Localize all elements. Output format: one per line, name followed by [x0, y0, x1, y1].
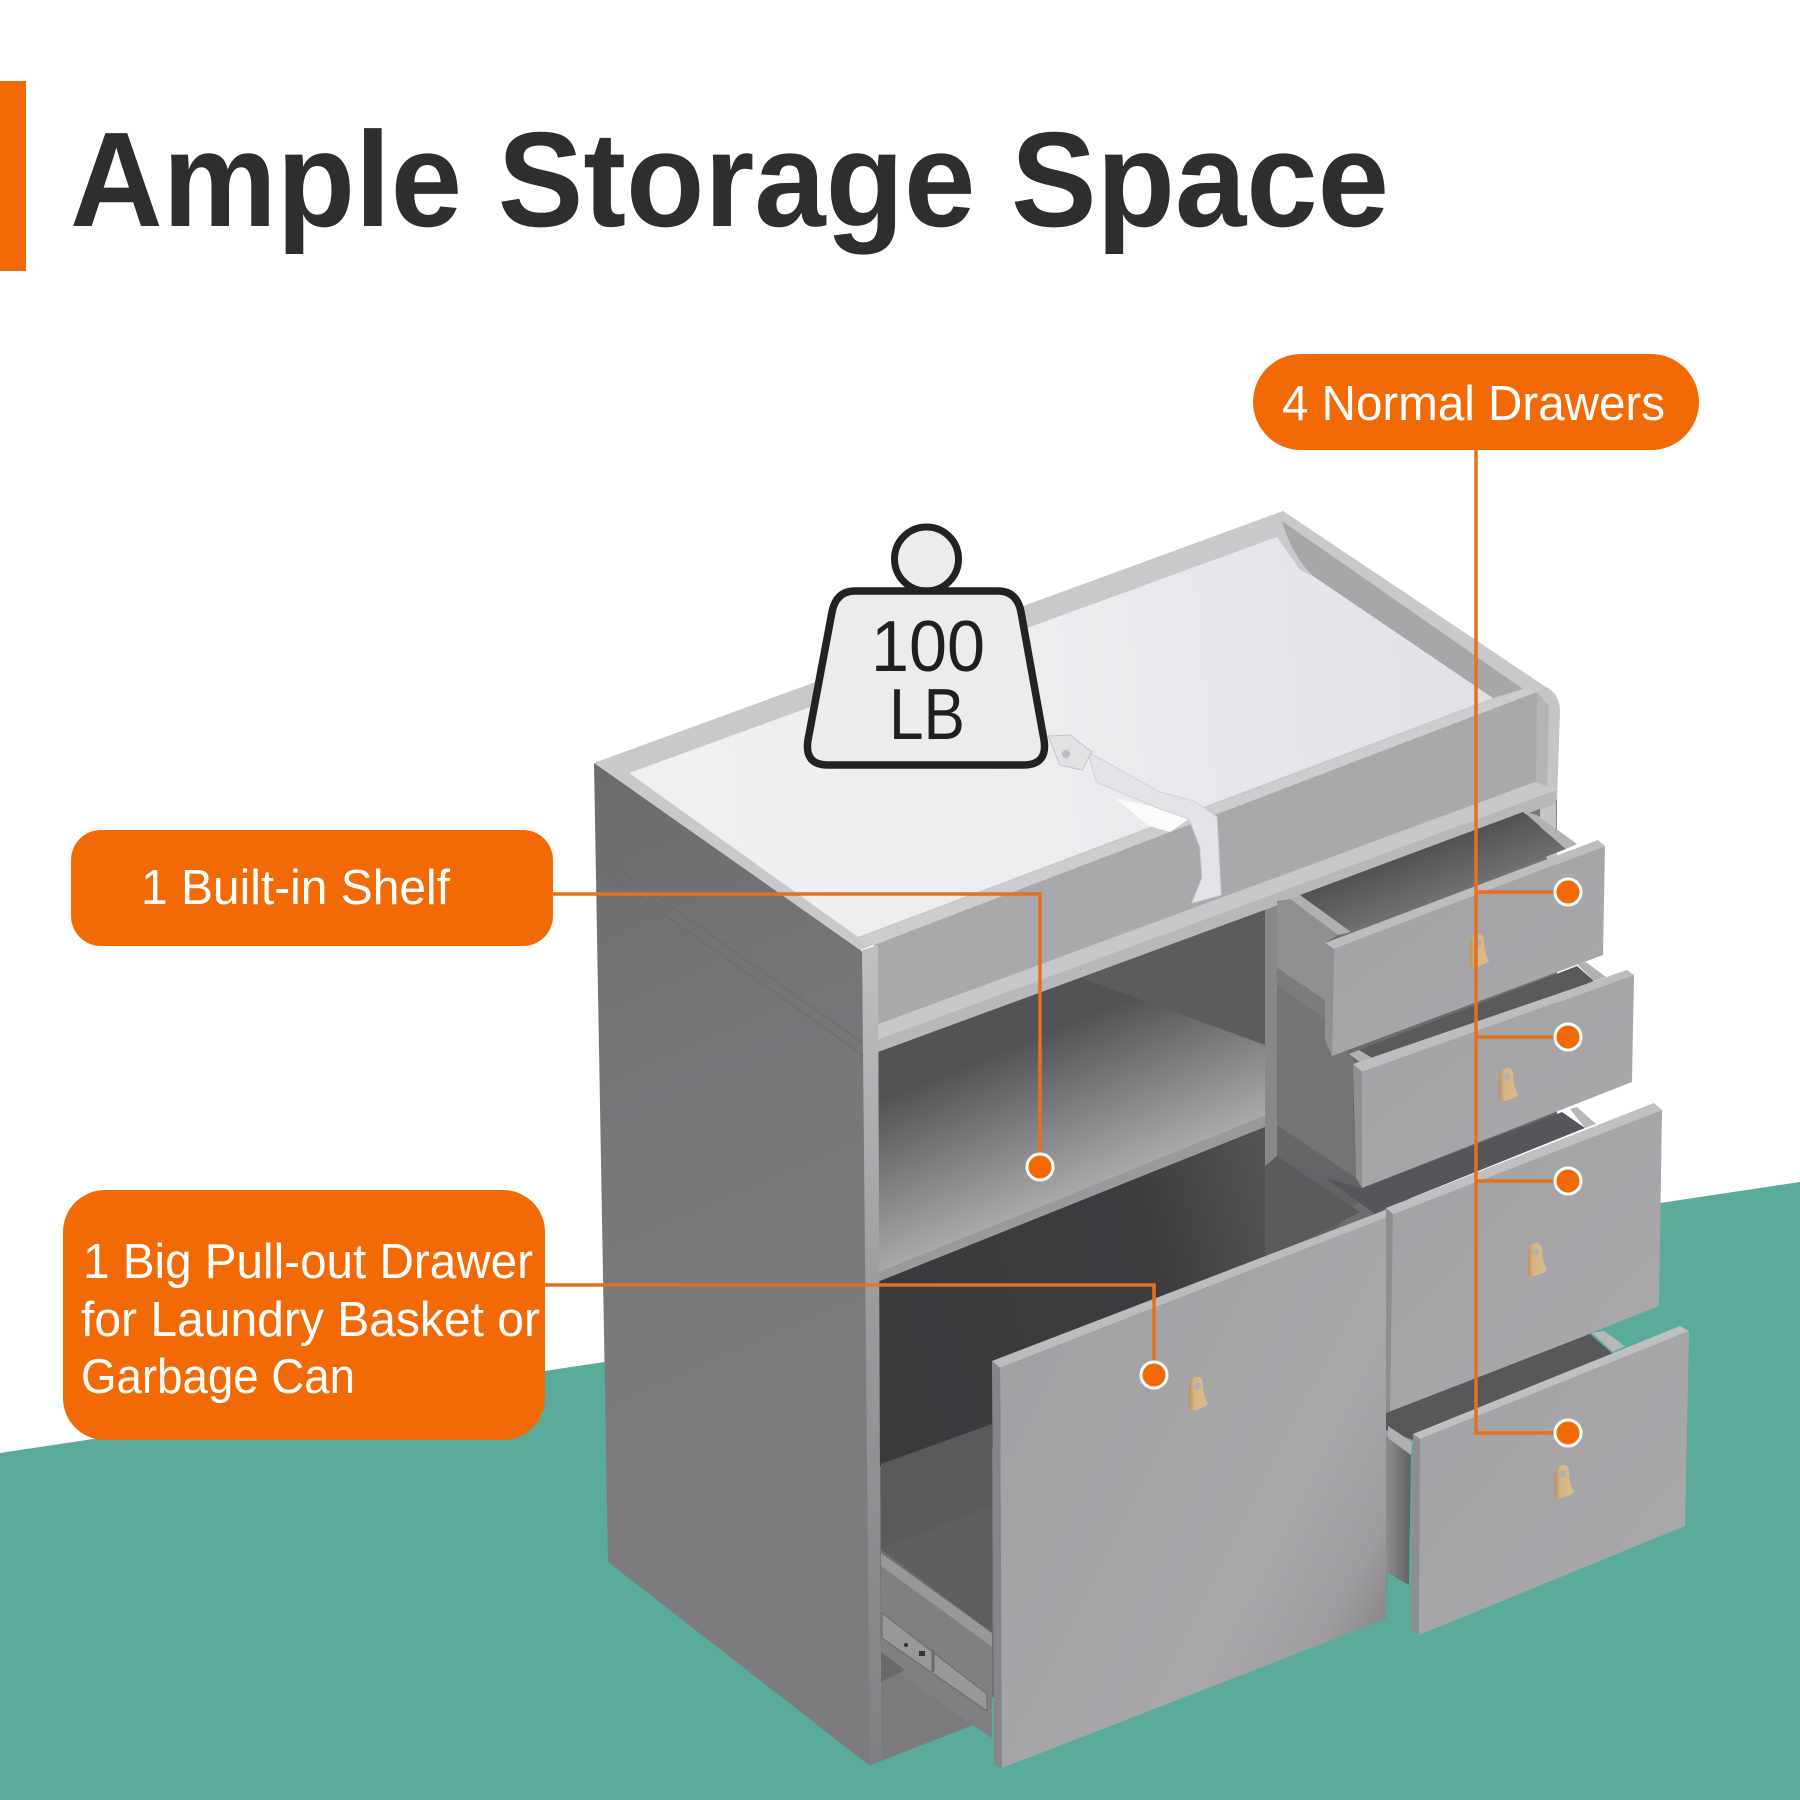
- pad safety strap and buckle: [1048, 735, 1221, 903]
- leader line: 4 normal drawers: [1476, 449, 1568, 1433]
- right edge above drawers: [1540, 803, 1557, 870]
- callout: built-in shelf: [71, 830, 553, 946]
- far side guard wall: [1282, 521, 1523, 698]
- weight icon: 100 LB: LB: [889, 675, 965, 755]
- cabinet base silhouette: [864, 690, 1557, 1700]
- weight icon: 100 LB: 100: [871, 607, 985, 687]
- right column interior: [1277, 800, 1557, 1300]
- front guard top edge: [858, 689, 1537, 945]
- big drawer interior: [881, 1424, 992, 1738]
- big pull-out drawer front: [992, 1209, 1390, 1768]
- second drawer: [1277, 962, 1634, 1188]
- title: Ample Storage Space: [70, 104, 1389, 255]
- leader line: pull-out drawer: [544, 1285, 1154, 1376]
- handle: third drawer: [1528, 1243, 1547, 1277]
- title accent bar: [0, 81, 26, 271]
- top drawer: [1277, 811, 1605, 1110]
- furniture: changing table dresser: [594, 511, 1689, 1768]
- background: teal floor: [0, 1182, 1800, 1800]
- leader line: built-in shelf: [552, 894, 1040, 1167]
- weight icon: 100 LB: [807, 527, 1045, 765]
- callout: big pull-out drawer: 1 Big Pull-out Drawer: [83, 1235, 533, 1289]
- ledge under guard: [876, 782, 1557, 1042]
- callout: built-in shelf: 1 Built-in Shelf: [141, 861, 450, 915]
- handle: bottom drawer: [1555, 1465, 1574, 1499]
- center divider: [1265, 903, 1277, 1200]
- handle: top drawer: [1470, 934, 1489, 968]
- top surface rim: [594, 511, 1556, 950]
- front guard face: [874, 692, 1537, 1027]
- marker dots: [1027, 879, 1581, 1446]
- third drawer: [1325, 1103, 1662, 1413]
- callout: 4 normal drawers: [1253, 354, 1699, 450]
- bottom drawer: [1386, 1326, 1689, 1635]
- lower compartment back wall: [870, 1127, 1265, 1468]
- cabinet base below drawer: [881, 1652, 973, 1761]
- callout: big pull-out drawer: for Laundry Basket or: [81, 1293, 540, 1347]
- changing pad: [629, 537, 1493, 937]
- handle: big drawer: [1189, 1377, 1208, 1411]
- cabinet left side panel: [594, 763, 870, 1766]
- drawer slide rail: [882, 1613, 987, 1711]
- callout: big pull-out drawer: Garbage Can: [81, 1350, 355, 1404]
- callout: 4 normal drawers: 4 Normal Drawers: [1282, 377, 1665, 431]
- right end cap: [1536, 687, 1560, 800]
- handle: second drawer: [1499, 1068, 1518, 1102]
- cabinet front edge strip: [862, 945, 881, 1766]
- upper compartment with built-in shelf: [870, 908, 1265, 1285]
- callout: big pull-out drawer: [63, 1190, 545, 1440]
